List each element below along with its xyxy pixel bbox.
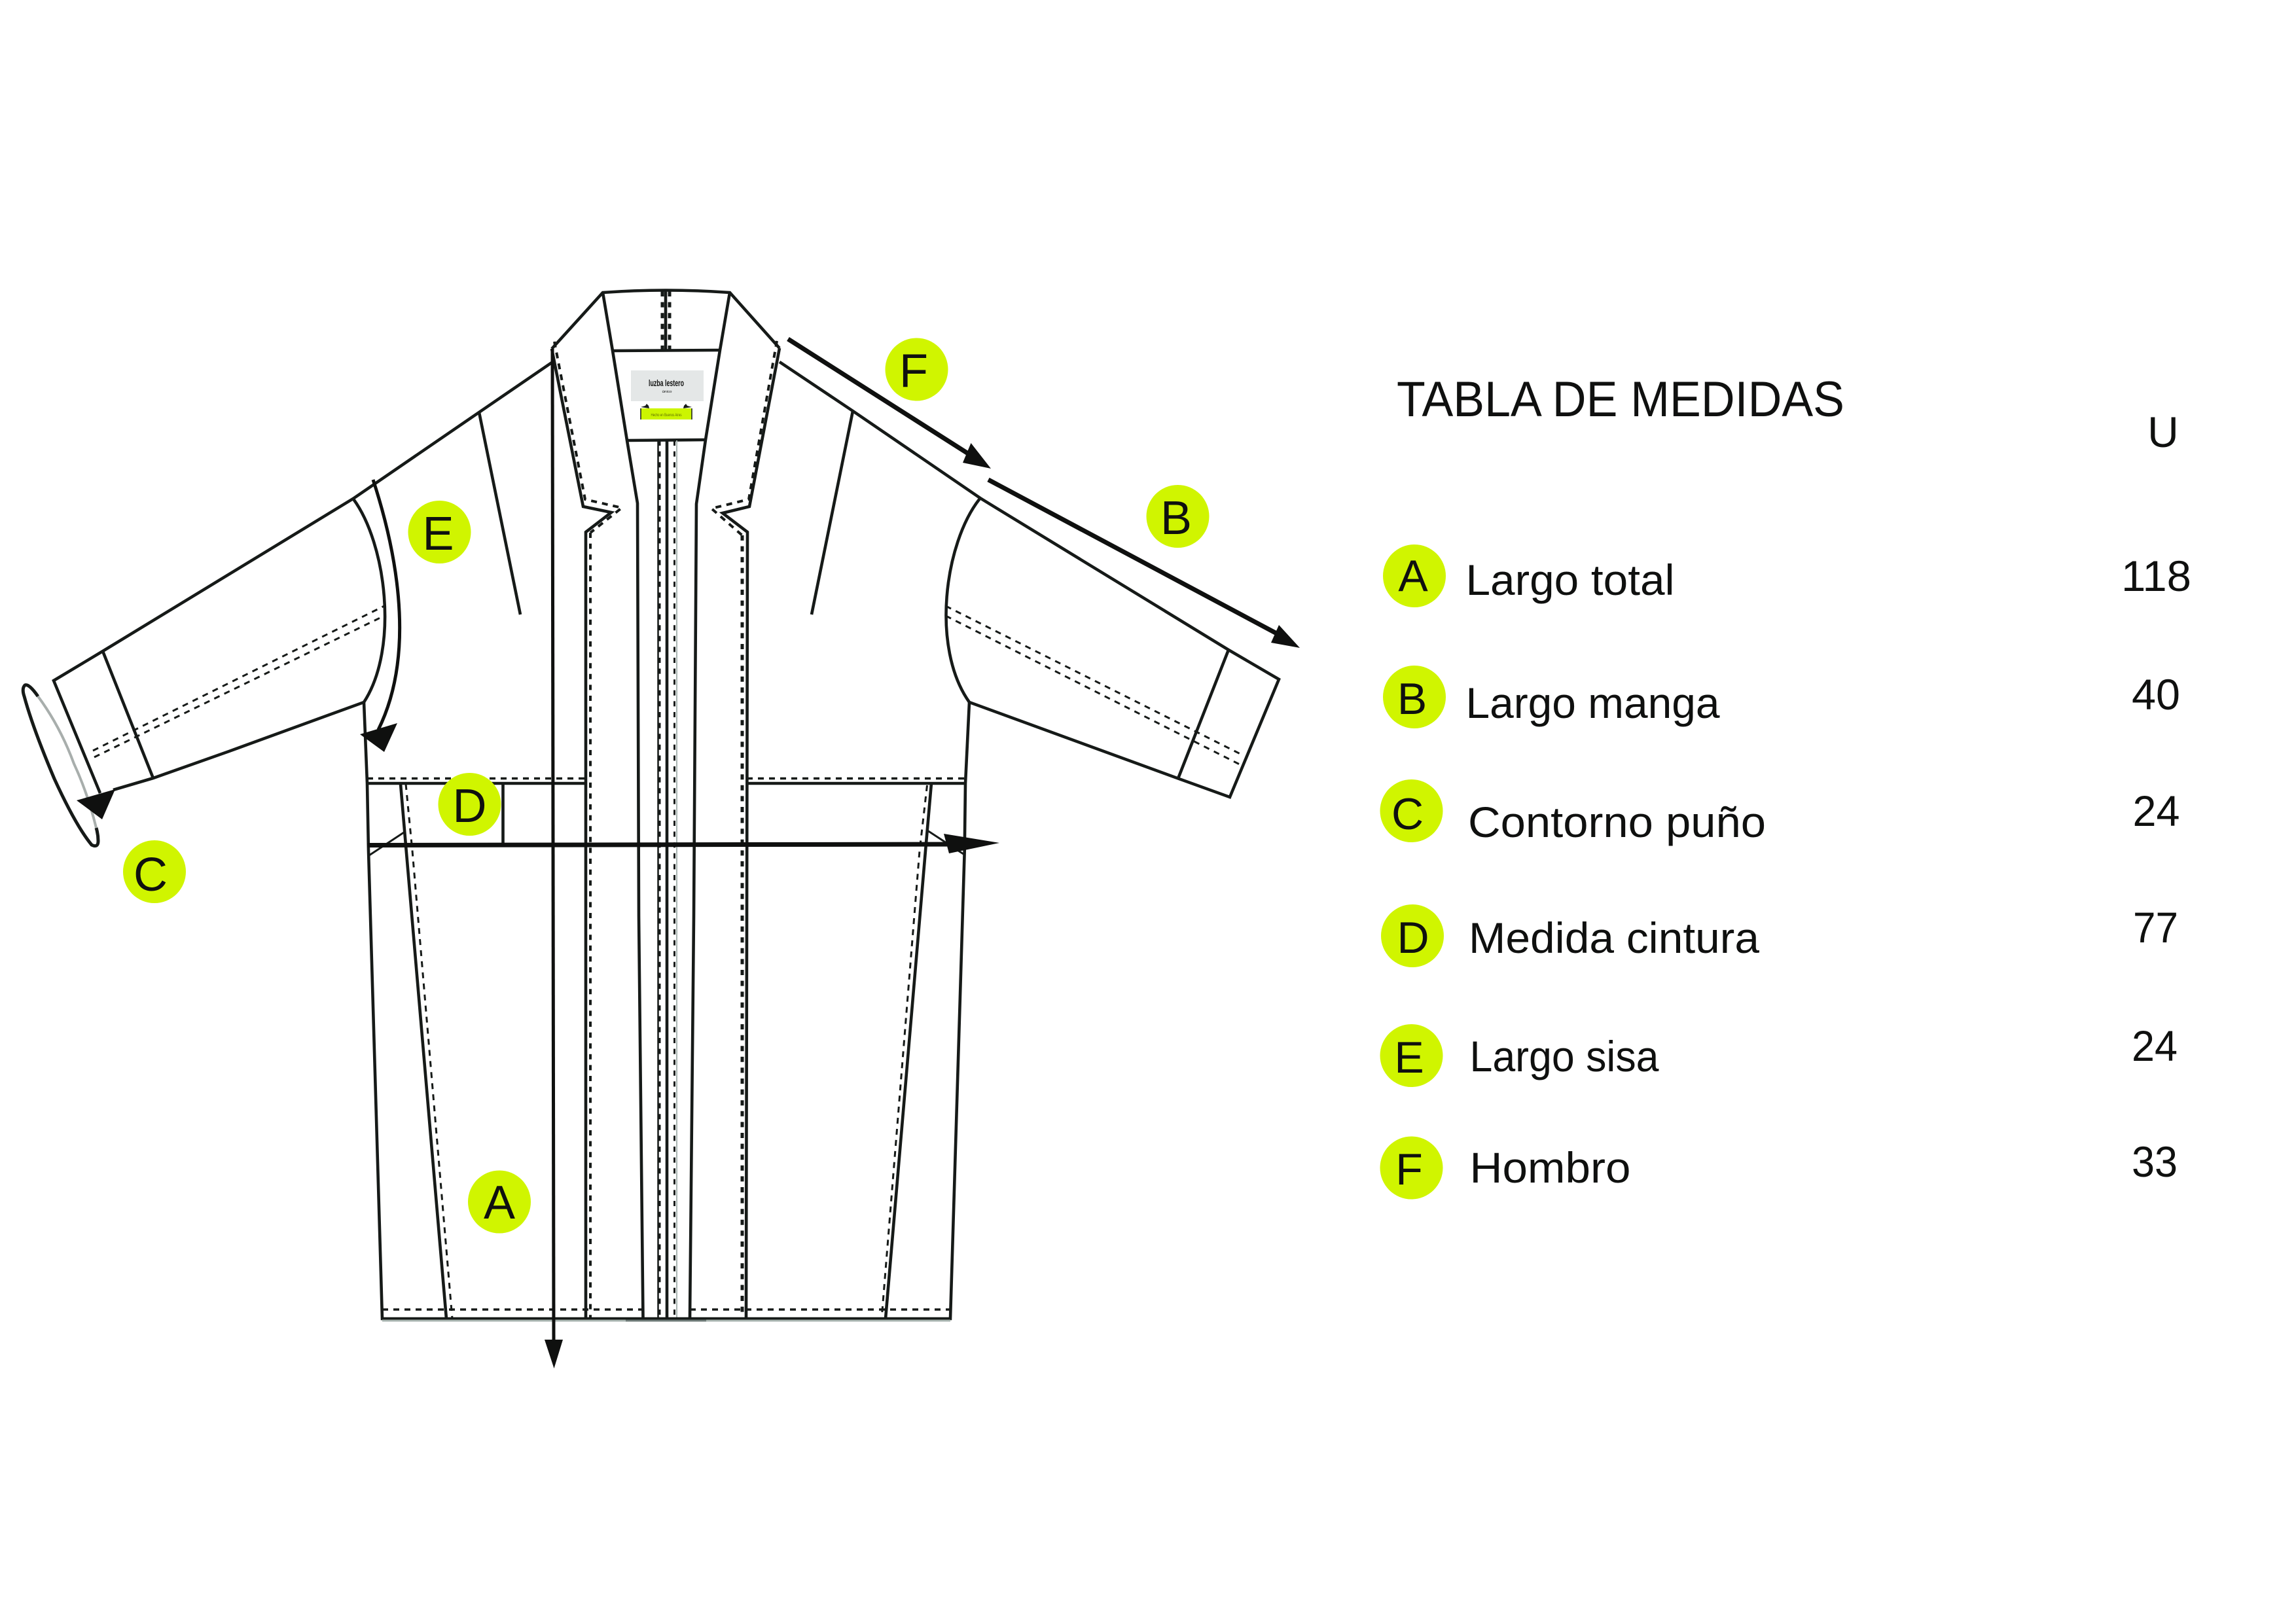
row C: contorno puño: C: [1391, 789, 1424, 839]
arrow E: armhole length: [360, 480, 400, 752]
unit column heading: U: [2147, 408, 2179, 456]
garment label: [631, 370, 704, 419]
row A: largo total: Largo total: [1466, 556, 1674, 604]
badge A on drawing: [468, 1170, 531, 1233]
row D: medida cintura: Medida cintura: [1469, 914, 1759, 962]
row D: medida cintura: [1381, 903, 2178, 967]
badge B on drawing: [1147, 485, 1210, 548]
cuff contour ellipse: [23, 685, 98, 846]
garment label: único: [662, 390, 672, 394]
garment label: Hecho en Buenos Aires: [651, 414, 682, 418]
row A: largo total: 118: [2121, 552, 2191, 600]
row A: largo total: A: [1398, 551, 1428, 601]
row E: largo sisa: 24: [2132, 1022, 2178, 1070]
row C: contorno puño: [1380, 779, 2179, 846]
table title: TABLA DE MEDIDAS: [1397, 372, 1844, 427]
right sleeve and shoulder: [780, 362, 1279, 797]
row A: largo total: [1383, 544, 2191, 607]
arrow A: total length: [545, 349, 563, 1368]
row C: contorno puño: Contorno puño: [1468, 798, 1766, 846]
row C: contorno puño: 24: [2132, 787, 2179, 835]
badge F on drawing: [885, 338, 948, 401]
row F: hombro: Hombro: [1470, 1143, 1631, 1192]
row B: largo manga: [1383, 666, 2180, 728]
badge C on drawing: C: [134, 849, 168, 901]
badge E on drawing: E: [422, 508, 454, 560]
row F: hombro: 33: [2132, 1137, 2178, 1186]
badge D on drawing: D: [453, 780, 487, 832]
arrow F: shoulder: [788, 339, 991, 469]
row B: largo manga: B: [1397, 674, 1427, 724]
centre front plackets: [658, 440, 677, 1319]
row B: largo manga: Largo manga: [1466, 679, 1720, 727]
arrow B: sleeve length: [988, 480, 1300, 648]
row E: largo sisa: [1380, 1022, 2178, 1087]
right lapel and front band: [690, 293, 780, 1319]
measurement table: [1380, 544, 2191, 1199]
jacket technical flat drawing: [54, 290, 1279, 1321]
row B: largo manga: 40: [2132, 670, 2180, 719]
badge E on drawing: [408, 501, 471, 563]
row E: largo sisa: E: [1394, 1033, 1424, 1082]
row F: hombro: [1380, 1136, 2178, 1199]
arrow D: waist measure: [367, 834, 999, 853]
garment label: luzba lestero: [649, 378, 684, 388]
badge C on drawing: [123, 840, 186, 903]
badge B on drawing: B: [1160, 492, 1192, 544]
collar: [552, 290, 780, 440]
row D: medida cintura: D: [1397, 913, 1429, 963]
badge D on drawing: [439, 773, 501, 836]
arrow C: cuff contour: [77, 789, 115, 819]
jacket body panels and hem: [364, 702, 969, 1321]
left lapel and front band: [552, 293, 643, 1319]
row D: medida cintura: 77: [2133, 903, 2178, 952]
row F: hombro: F: [1395, 1145, 1423, 1194]
badge A on drawing: A: [484, 1177, 515, 1229]
badge F on drawing: F: [899, 345, 928, 397]
row E: largo sisa: Largo sisa: [1470, 1032, 1659, 1080]
left sleeve and shoulder: [54, 363, 552, 793]
